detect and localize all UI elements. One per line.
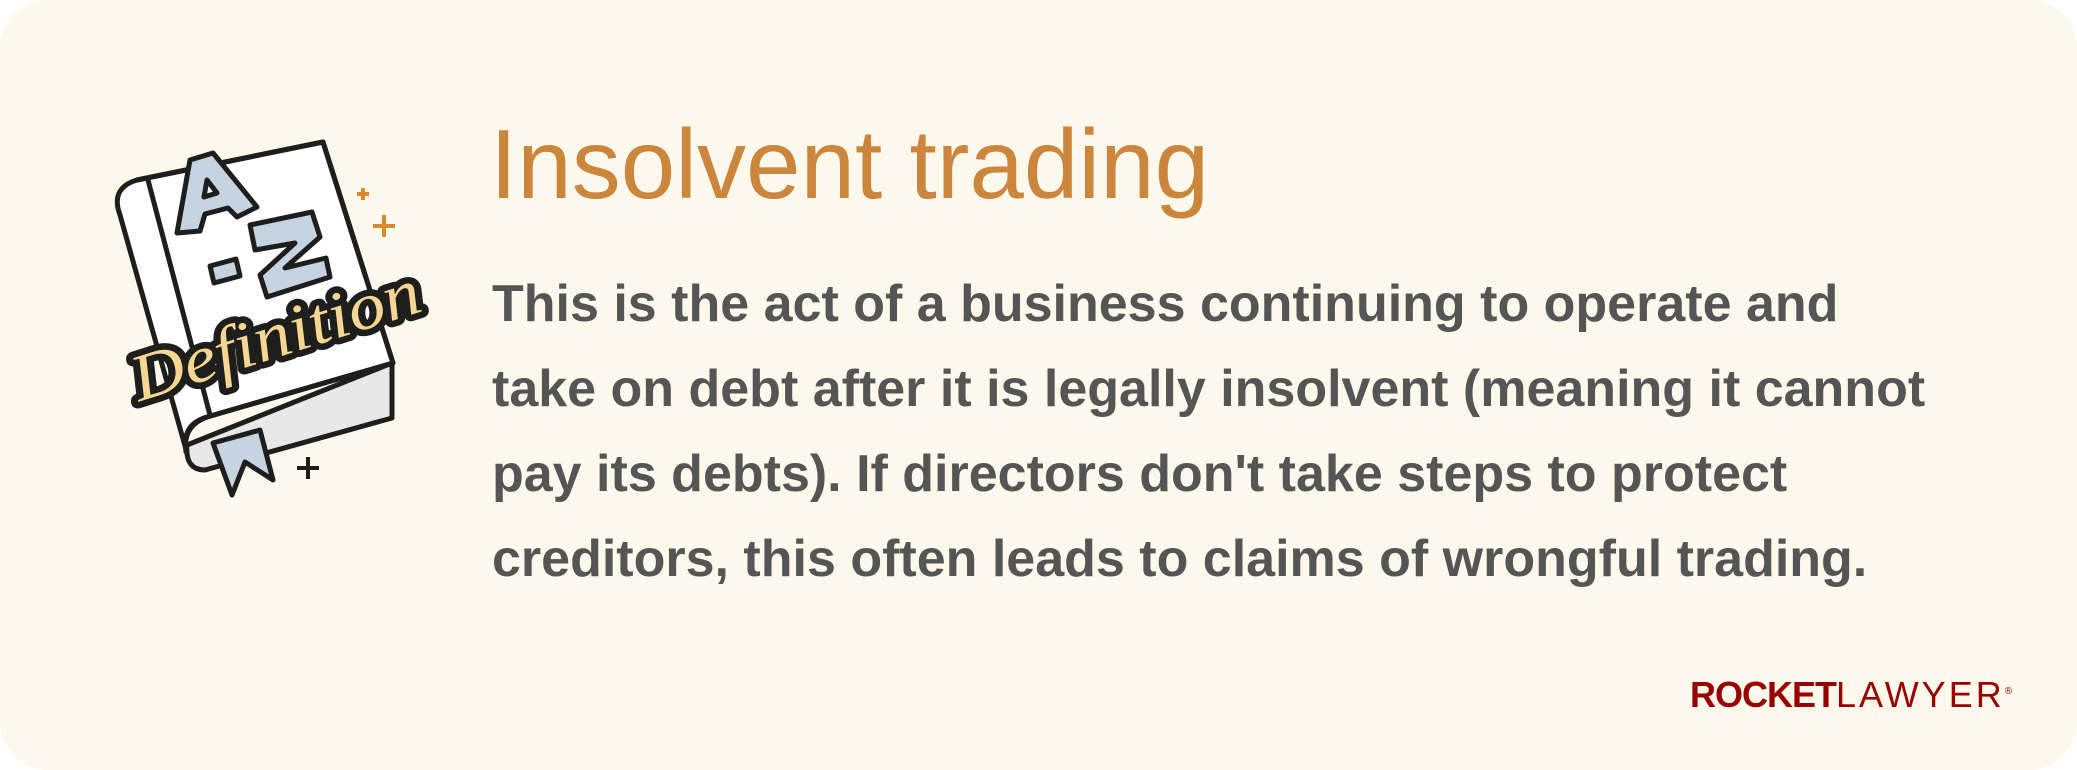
title: Insolvent trading: [490, 109, 1209, 219]
logo: Rocket Lawyer: ROCKETLAWYER®: [1690, 674, 2012, 715]
body text: [492, 275, 1925, 588]
body text: This is the act of a business continuing to operate and: [492, 275, 1838, 333]
body text: pay its debts). If directors don't take steps to protect: [492, 445, 1787, 503]
icon: A-Z definition book: [114, 140, 429, 498]
icon: A-Z definition book: Definition: [120, 255, 429, 416]
body text: take on debt after it is legally insolvent (meaning it cannot: [492, 360, 1925, 418]
body text: creditors, this often leads to claims of wrongful trading.: [492, 530, 1867, 588]
